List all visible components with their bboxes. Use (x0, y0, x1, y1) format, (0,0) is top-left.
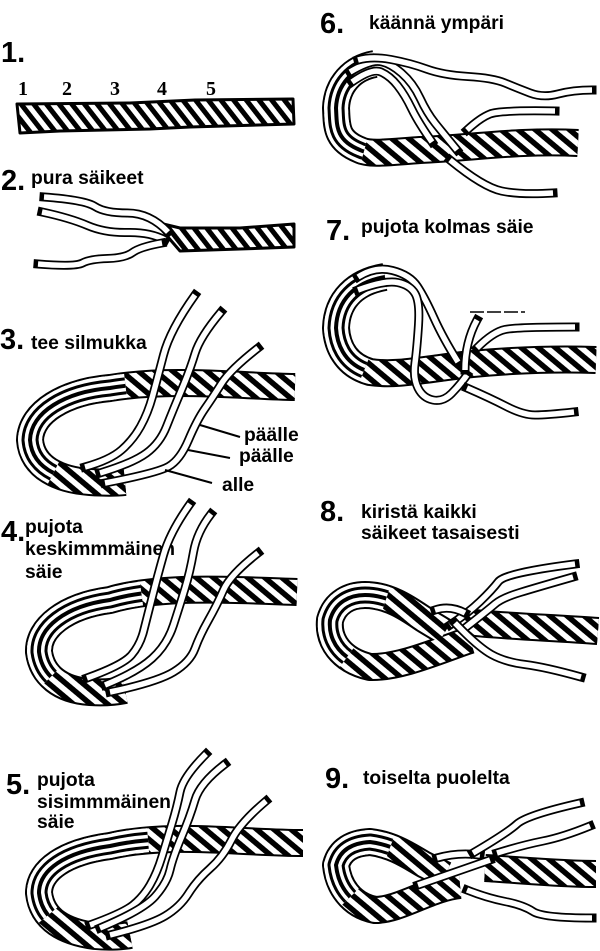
strands (358, 269, 575, 415)
step 8: tighten strands evenly (320, 496, 598, 677)
rope end (155, 222, 294, 251)
rope loop (336, 64, 578, 153)
label alle: alle (222, 475, 254, 496)
rope loop (336, 842, 596, 910)
rope marker numbers: 3 (110, 78, 120, 100)
leader lines (165, 425, 240, 483)
strands (350, 58, 592, 194)
step 7: thread third strand (326, 215, 596, 415)
heading: kiristä kaikki (361, 502, 477, 523)
step number 6: 6. (320, 8, 344, 40)
heading: pujota (37, 770, 95, 791)
step 2: unlay strands (1, 165, 294, 265)
step 4: thread middle strand (1, 504, 297, 692)
step 9: other side (325, 763, 596, 918)
step number 9: 9. (325, 763, 349, 795)
heading: toiselta puolelta (363, 768, 510, 789)
rope loop (39, 839, 303, 937)
heading: säie (37, 812, 75, 833)
heading: säikeet tasaisesti (361, 523, 520, 544)
rope loop (39, 590, 297, 692)
strands (418, 803, 592, 918)
step 1: straight rope (1, 37, 294, 133)
step 3: make the loop (0, 295, 299, 496)
strands (87, 504, 258, 692)
step 6: turn over (320, 8, 592, 194)
heading: sisimmmäinen (37, 792, 171, 813)
step number 2: 2. (1, 165, 25, 197)
heading: tee silmukka (31, 333, 147, 354)
step number 5: 5. (6, 769, 30, 801)
step number 7: 7. (326, 215, 350, 247)
strands (85, 295, 258, 483)
step number 1: 1. (1, 37, 25, 69)
rope loop (30, 383, 295, 483)
heading: säie (25, 562, 63, 583)
rope marker numbers: 5 (206, 78, 216, 100)
rope marker numbers: 1 (18, 78, 28, 100)
step number 8: 8. (320, 496, 344, 528)
heading: keskimmmäinen (25, 539, 175, 560)
heading: käännä ympäri (369, 13, 504, 34)
rope (17, 99, 294, 133)
rope loop (336, 277, 596, 373)
heading: pujota (25, 517, 83, 538)
label paalle 2: päälle (239, 446, 294, 467)
step number 4: 4. (1, 516, 25, 548)
step number 3: 3. (0, 324, 24, 356)
strands (90, 754, 266, 935)
heading: pujota kolmas säie (361, 217, 534, 238)
label paalle 1: päälle (244, 425, 299, 446)
unlaid strands (38, 197, 168, 265)
heading: pura säikeet (31, 168, 144, 189)
faint mark (470, 311, 525, 313)
step 5: thread innermost strand (6, 754, 303, 937)
rope loop (330, 595, 598, 667)
rope marker numbers: 4 (157, 78, 167, 100)
rope marker numbers: 2 (62, 78, 72, 100)
strands (435, 564, 581, 677)
